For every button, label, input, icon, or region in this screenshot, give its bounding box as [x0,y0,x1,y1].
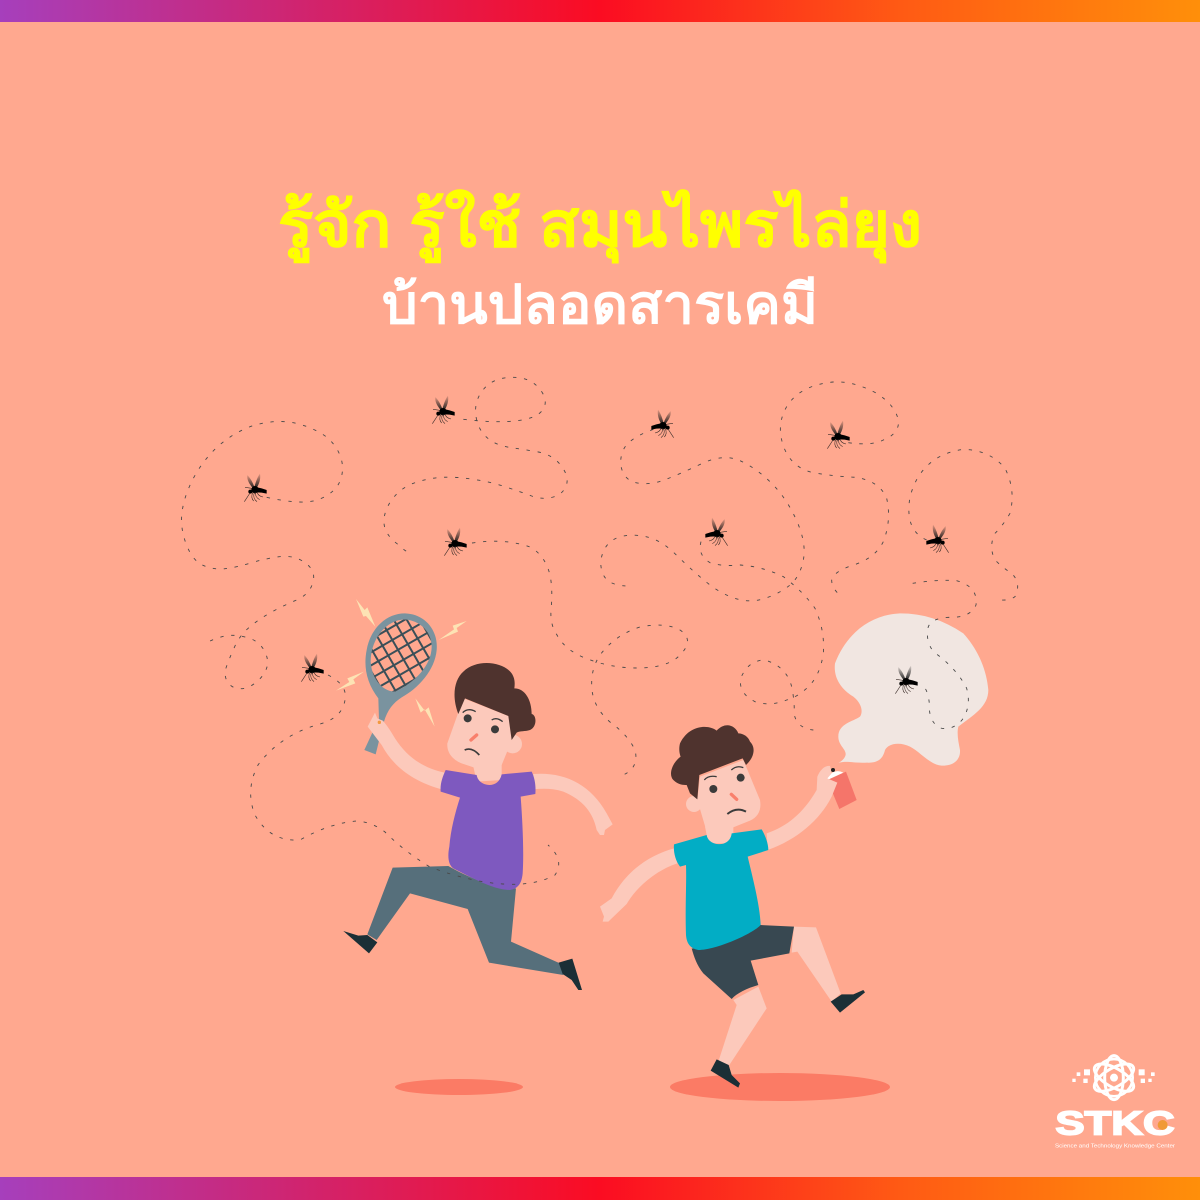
boy with racket [331,584,613,990]
back arm [533,774,613,835]
facial features [463,710,503,755]
icon: atom [1090,1056,1138,1100]
mosquito flight paths, right [601,382,1018,730]
shoes [711,990,865,1088]
ear and neck [686,796,733,843]
face [447,698,513,774]
raised arm [767,766,837,850]
teal shirt [674,829,768,950]
spray smoke cloud [835,613,988,766]
ear and neck [473,735,522,782]
STKC logo [1055,1056,1175,1149]
boy with spray can [600,725,865,1088]
decorative squares [1072,1069,1155,1083]
facial features [704,767,746,814]
trousers [367,866,563,975]
purple shirt [441,770,536,890]
hair [455,663,535,740]
shoes [343,931,582,990]
top gradient bar [0,0,1200,22]
logo dot [1158,1120,1168,1130]
back arm [600,848,677,922]
spray can [827,768,857,809]
mosquito flight paths, left [182,377,567,689]
shorts [692,925,794,999]
logo wordmark: STKC [1055,1105,1175,1142]
electric racket [364,613,437,754]
bottom gradient bar [0,1177,1200,1200]
mosquito flight paths, centre [251,541,688,884]
subtitle: บ้านปลอดสารเคมี [382,275,818,335]
mosquitoes [244,396,949,694]
face [697,760,760,833]
title: รู้จัก รู้ใช้ สมุนไพรไล่ยุง [278,189,922,263]
raised arm [368,713,445,789]
ground shadow: right boy [670,1073,890,1101]
icon: electric sparks [336,599,467,727]
logo tagline: Science and Technology Knowledge Center [1055,1143,1175,1149]
hair [671,725,754,799]
ground shadow: left boy [395,1079,523,1095]
legs [718,927,841,1065]
